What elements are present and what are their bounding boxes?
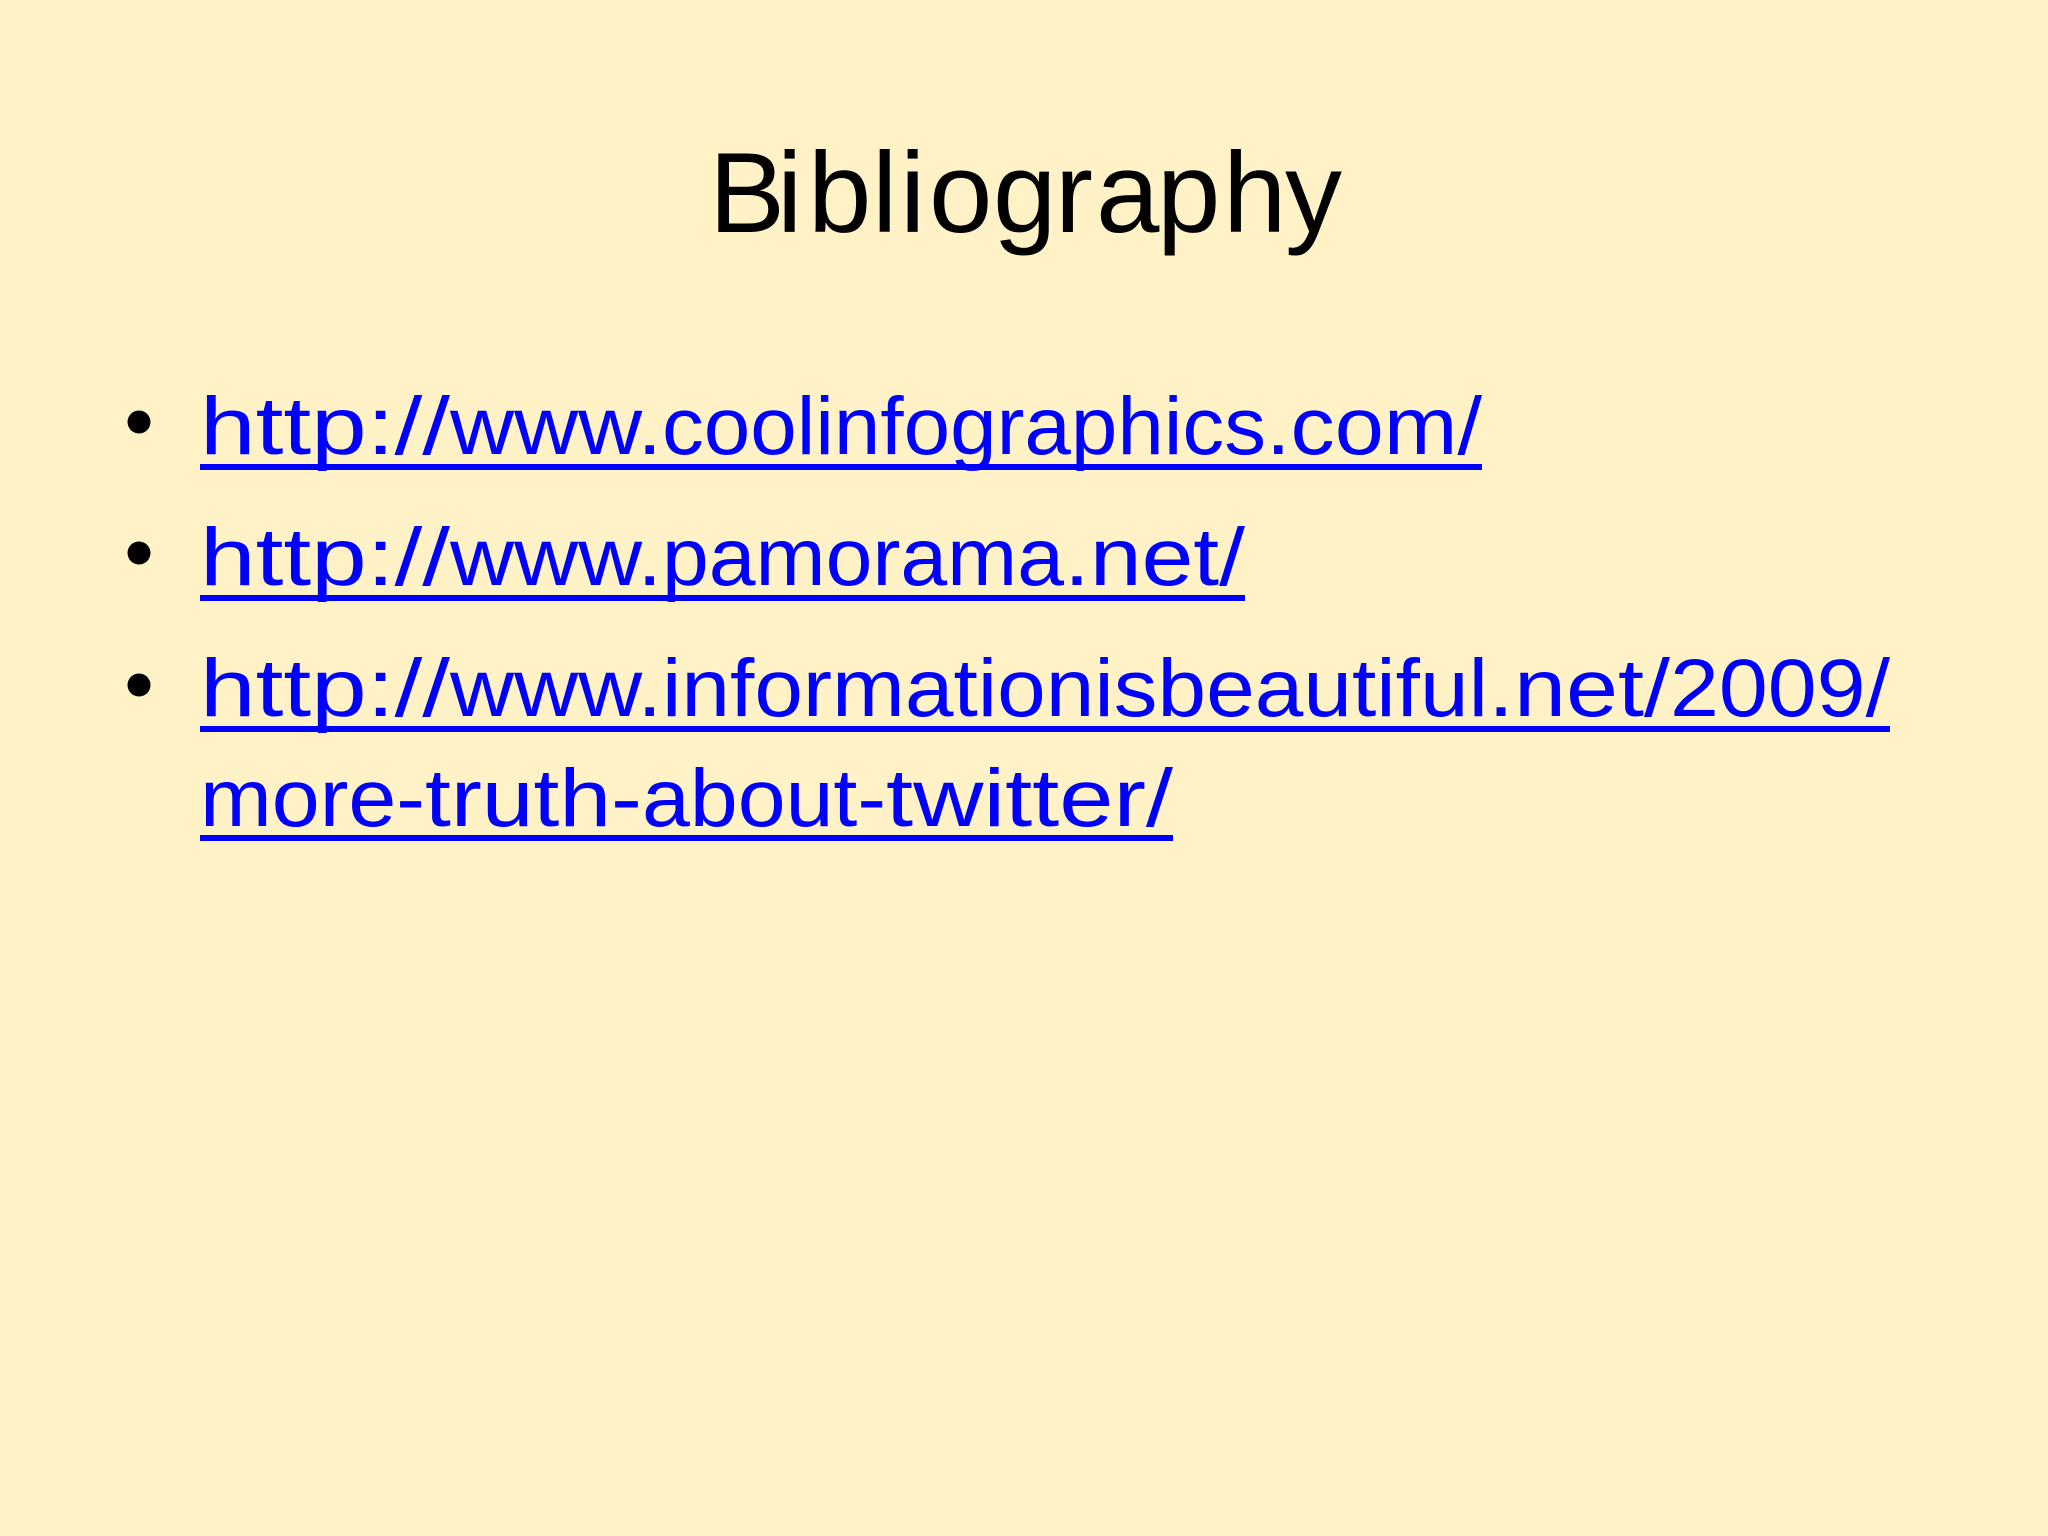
bullet bbox=[128, 410, 150, 434]
link text line 2: truth- bbox=[425, 753, 642, 844]
link text line 1: http:// bbox=[200, 643, 450, 734]
link text line 1: informationisbeautiful bbox=[662, 643, 1488, 734]
link text line 2: more- bbox=[200, 753, 425, 844]
link text: http:// bbox=[200, 381, 450, 472]
link text: www. bbox=[449, 381, 662, 472]
link text: pamorama bbox=[662, 512, 1064, 603]
bullet bbox=[128, 542, 150, 564]
title: Bibliography bbox=[709, 130, 1342, 257]
link text line 2: twitter/ bbox=[886, 753, 1173, 844]
list item: coolinfographics link bbox=[128, 381, 1482, 472]
bibliography list bbox=[128, 381, 1890, 844]
link text line 2: about- bbox=[642, 753, 886, 844]
link underline bbox=[200, 464, 1482, 470]
link text line 1: 2009/ bbox=[1670, 643, 1890, 734]
link text: http:// bbox=[200, 512, 450, 603]
link text: www. bbox=[449, 512, 662, 603]
list item: informationisbeautiful link bbox=[128, 643, 1890, 844]
link text line 1: www. bbox=[449, 643, 662, 734]
bullet bbox=[128, 674, 150, 696]
link underline bbox=[200, 595, 1245, 601]
link text line 1: .net/ bbox=[1488, 643, 1670, 734]
link text: coolinfographics bbox=[662, 381, 1266, 472]
link underline line 1 bbox=[200, 726, 1890, 732]
link text: .com/ bbox=[1266, 381, 1482, 472]
link text: .net/ bbox=[1064, 512, 1245, 603]
link underline line 2 bbox=[200, 835, 1173, 841]
list item: pamorama link bbox=[128, 512, 1245, 603]
